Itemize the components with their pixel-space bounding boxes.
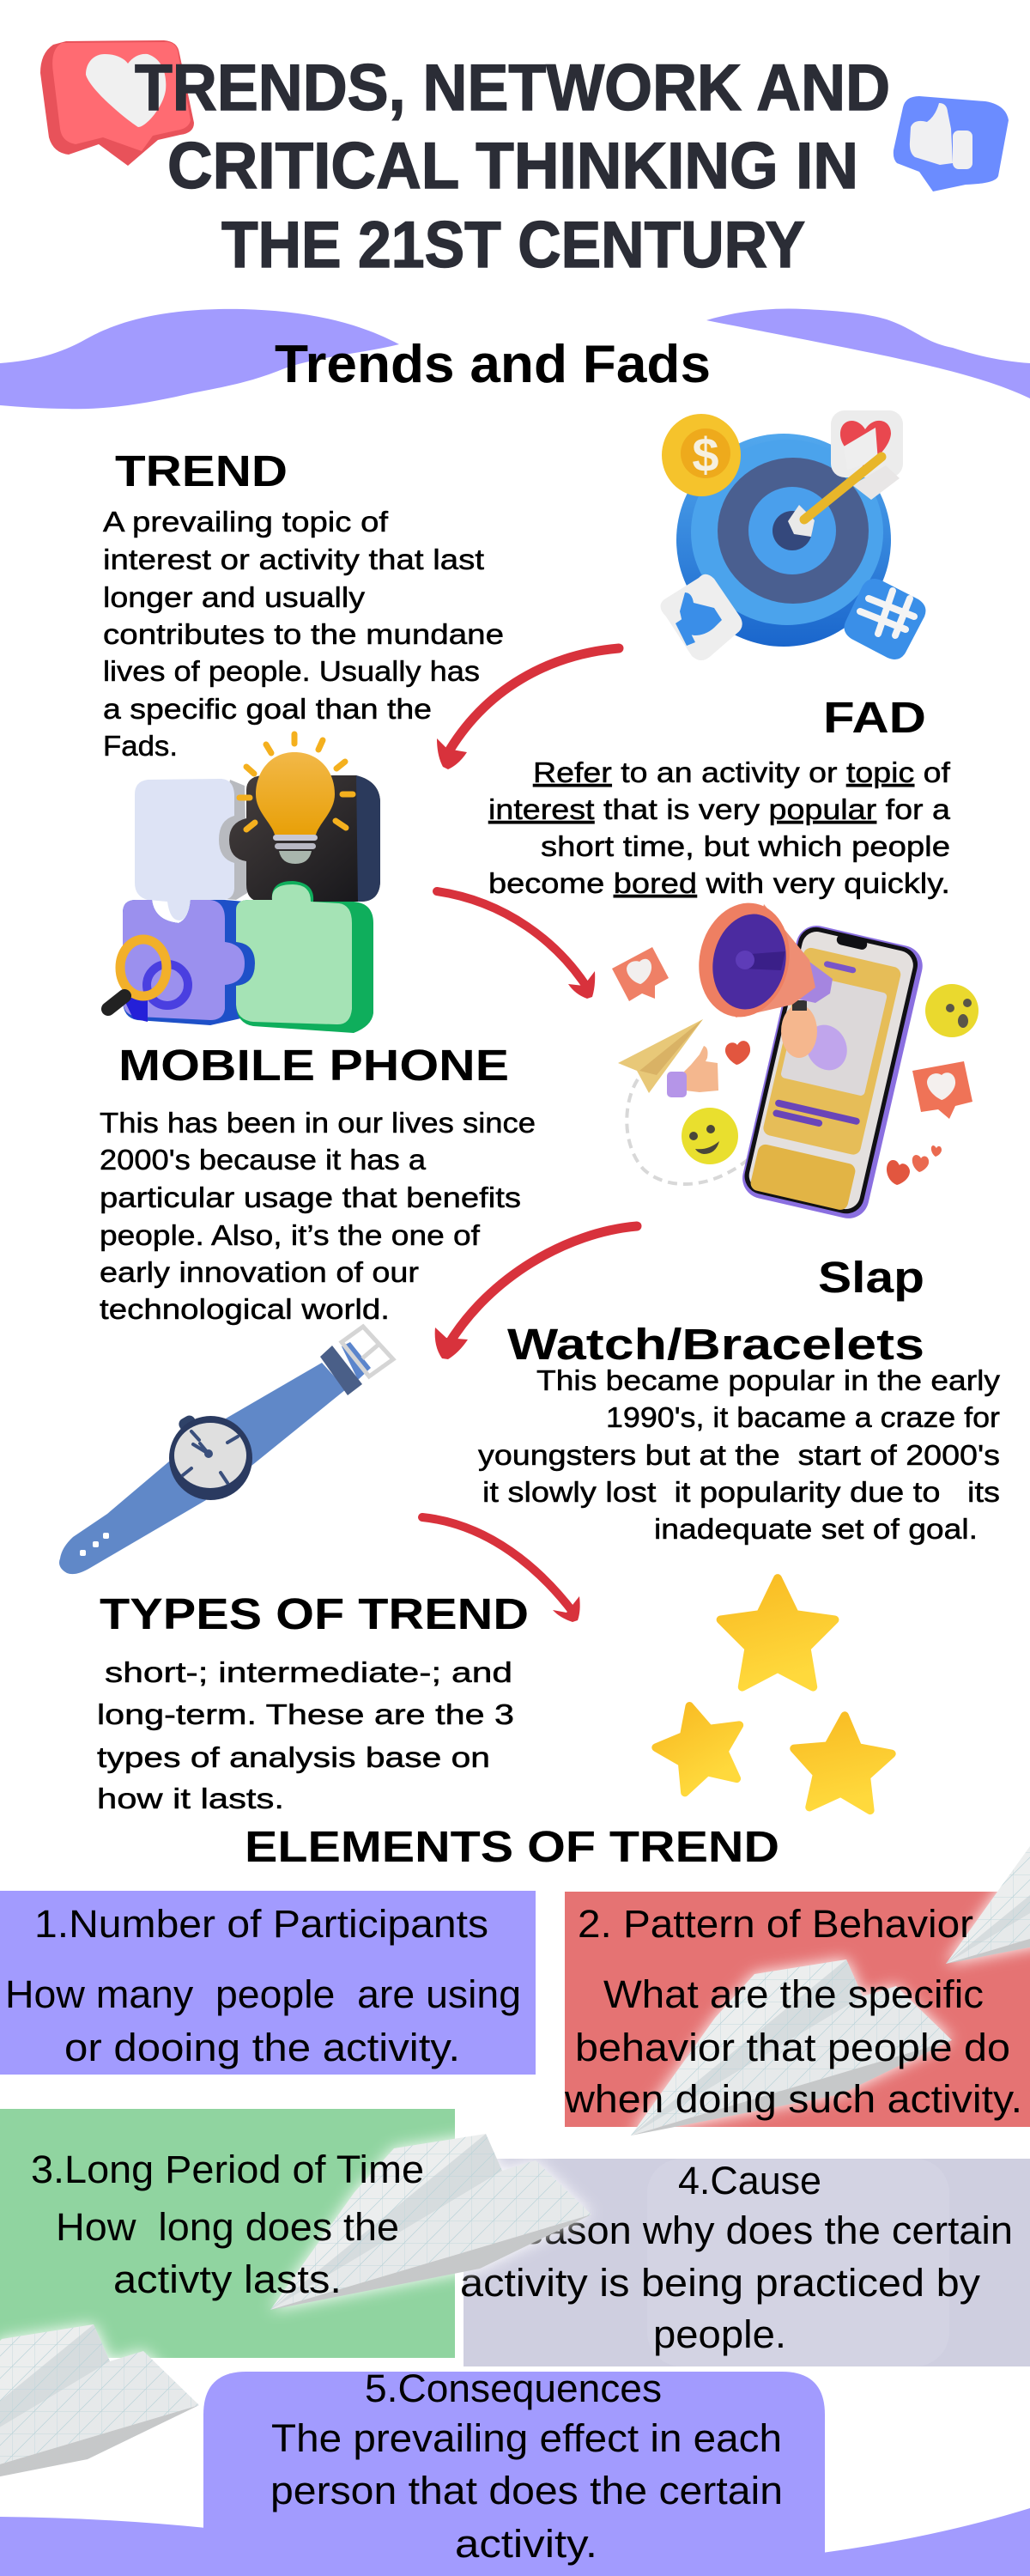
text block: mobile phone description: early innovation of our (100, 1256, 419, 1288)
text block: trend description: contributes to the mundane (103, 618, 504, 650)
heading: mobile phone: MOBILE PHONE (118, 1041, 509, 1090)
panel: number of participants: 1.Number of Participants (34, 1902, 488, 1946)
panel: consequences: 5.Consequences (365, 2366, 662, 2410)
text block: types of trend description: short-; intermediate-; and (105, 1656, 512, 1688)
arrow: watch to stars (422, 1517, 580, 1622)
title: CRITICAL THINKING IN (167, 130, 858, 203)
panel: cause: The reason why does the certain (427, 2208, 1013, 2252)
text block: fad description: interest that is very popular for a (488, 793, 951, 825)
text block: mobile phone description: This has been in our lives since (100, 1107, 536, 1139)
panel: number of participants: How many people are using (5, 1972, 521, 2016)
panel: number of participants (0, 1891, 536, 2075)
heading: trend: TREND (115, 447, 288, 495)
text block: trend description: interest or activity that last (103, 544, 484, 575)
panel: consequences: person that does the certain (270, 2469, 783, 2512)
bottom wave (0, 2508, 1030, 2576)
text block: trend description (103, 506, 504, 762)
icon: phone with megaphone (612, 895, 978, 1223)
text block: mobile phone description (100, 1107, 536, 1325)
heading: elements of trend: ELEMENTS OF TREND (245, 1822, 779, 1871)
panel: cause (427, 2159, 1030, 2366)
icon: heart speech bubble (40, 40, 194, 166)
text block: mobile phone description: 2000's because it has a (100, 1144, 427, 1176)
panel: cause: activity is being practiced by (460, 2261, 981, 2305)
panel: pattern of behavior (564, 1788, 1030, 2136)
text block: fad description: short time, but which people (541, 830, 950, 862)
icon: three gold stars (648, 1578, 894, 1812)
heading: slap watch / bracelets: Slap (818, 1253, 924, 1302)
text block: fad description: Refer to an activity or topic of (533, 756, 951, 788)
icon: puzzle with light bulb (108, 734, 380, 1033)
icon: thumbs up speech bubble (894, 96, 1009, 191)
text block: types of trend description: long-term. These are the 3 (97, 1698, 514, 1730)
text block: slap watch description: inadequate set of goal. (654, 1513, 978, 1545)
text block: trend description: Fads. (103, 730, 178, 762)
text block: trend description: longer and usually (103, 581, 366, 613)
panel: long period of time: activty lasts. (113, 2257, 342, 2301)
panel: cause: 4.Cause (678, 2159, 821, 2202)
text block: fad description: become bored with very quickly. (488, 867, 950, 899)
panel: consequences (203, 2366, 825, 2576)
top right wave (706, 309, 1030, 398)
text block: slap watch description: it slowly lost it popularity due to its (482, 1476, 1000, 1508)
text block: types of trend description (97, 1656, 514, 1814)
text block: trend description: lives of people. Usually has (103, 655, 480, 687)
panel: consequences: The prevailing effect in each (271, 2416, 782, 2460)
arrow: phone to watch (435, 1226, 637, 1359)
text block: fad description (488, 756, 951, 899)
panel: pattern of behavior: behavior that people do (575, 2026, 1010, 2069)
title: TRENDS, NETWORK AND (135, 52, 890, 125)
text block: mobile phone description: technological world. (100, 1293, 390, 1325)
panel: pattern of behavior: when doing such activity. (564, 2077, 1022, 2121)
icon: target with arrow (660, 410, 925, 660)
panel: long period of time: How long does the (56, 2205, 399, 2249)
text block: slap watch description: This became popular in the early (536, 1364, 1001, 1396)
text block: mobile phone description: people. Also, it’s the one of (100, 1219, 481, 1251)
arrow: puzzle to phone (437, 891, 595, 999)
heading: trends and fads: Trends and Fads (275, 335, 711, 394)
panel: pattern of behavior: What are the specific (603, 1972, 984, 2016)
panel: pattern of behavior: 2. Pattern of Behavior (578, 1902, 973, 1946)
text block: mobile phone description: particular usage that benefits (100, 1182, 521, 1213)
heading: slap watch / bracelets (507, 1253, 924, 1369)
panel: consequences: activity. (455, 2522, 597, 2566)
heading: slap watch / bracelets: Watch/Bracelets (507, 1320, 924, 1369)
panel: cause: people. (653, 2312, 786, 2356)
title: THE 21ST CENTURY (221, 209, 805, 282)
heading: types of trend: TYPES OF TREND (100, 1589, 529, 1638)
title (135, 52, 890, 282)
icon: wristwatch (59, 1327, 393, 1574)
text block: slap watch description: youngsters but at the start of 2000's (478, 1439, 1000, 1471)
icon: paper plane bottom left (0, 2324, 199, 2500)
text block: slap watch description (478, 1364, 1001, 1545)
heading: fad: FAD (823, 693, 926, 742)
icon: target with arrow: $ (692, 428, 719, 482)
panel: long period of time: 3.Long Period of Time (31, 2148, 424, 2191)
text block: types of trend description: types of analysis base on (97, 1741, 490, 1773)
top left wave (0, 309, 399, 409)
text block: slap watch description: 1990's, it bacame a craze for (606, 1401, 1000, 1433)
text block: types of trend description: how it lasts. (97, 1783, 284, 1814)
text block: trend description: A prevailing topic of (103, 506, 389, 538)
panel: number of participants: or dooing the activity. (64, 2026, 460, 2069)
arrow: target to trend (437, 648, 619, 769)
text block: trend description: a specific goal than the (103, 693, 432, 725)
panel: long period of time (0, 2109, 591, 2358)
